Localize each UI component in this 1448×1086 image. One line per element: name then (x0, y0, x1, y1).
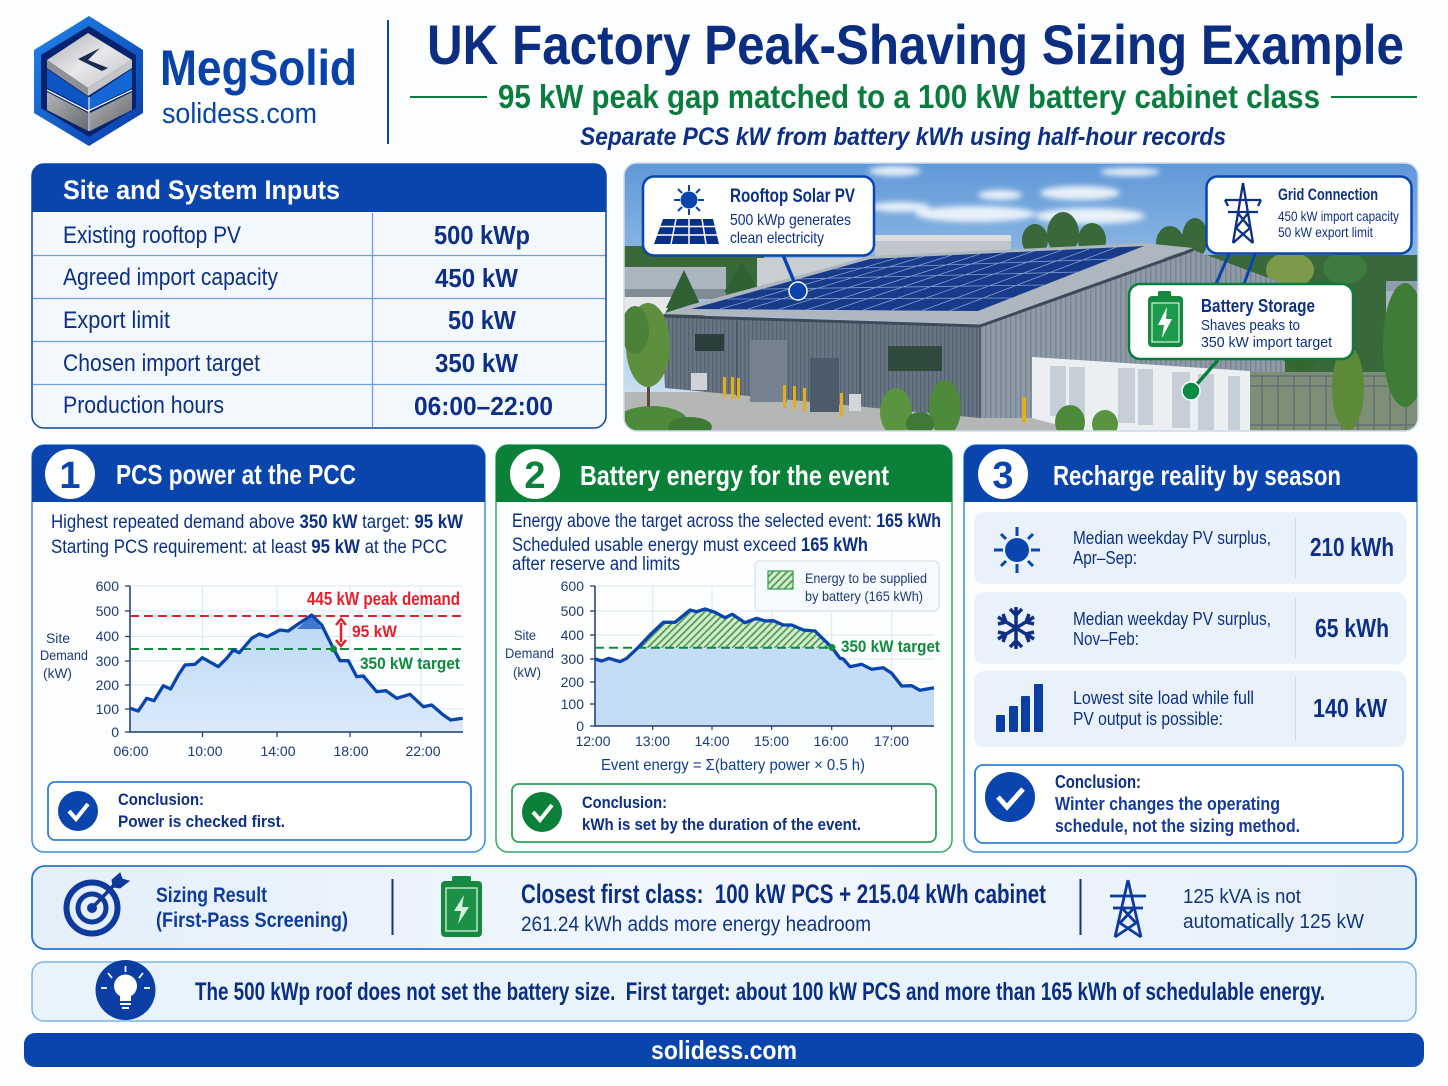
panel: factory photo illustration (616, 163, 1427, 439)
chart: event energy above target: 14:00 (694, 733, 730, 749)
conclusion 3: Conclusion: (1055, 772, 1141, 792)
icon: pylon (1225, 183, 1261, 243)
panel 3 heading: Recharge reality by season (1053, 460, 1341, 491)
chart: site demand 06:00 to 24:00: 10:00 (187, 743, 223, 759)
foreground trees and bushes (616, 283, 1427, 439)
chart: site demand 06:00 to 24:00: Demand (40, 647, 88, 663)
chart: site demand 06:00 to 24:00: 400 (96, 628, 119, 644)
panel: site and system inputs (32, 164, 606, 428)
callout: rooftop solar PV: 500 kWp generates (730, 212, 851, 229)
icon: battery (1148, 291, 1183, 347)
conclusion 2 (512, 784, 936, 842)
row: winter surplus: Median weekday PV surplus, (1073, 609, 1271, 629)
result label (156, 884, 348, 932)
row: import target: 350 kW (435, 348, 518, 378)
battery cabinets (1032, 357, 1250, 431)
row: lowest site load: 140 kW (1313, 693, 1387, 723)
icon: pylon (1110, 880, 1146, 937)
callout: battery storage: Battery Storage (1201, 296, 1315, 316)
badge: number 3 (978, 449, 1028, 499)
annotation: target: 350 kW target (360, 654, 460, 673)
chart: site demand 06:00 to 24:00: 22:00 (405, 743, 441, 759)
row: production hours (63, 391, 553, 421)
conclusion 3: schedule, not the sizing method. (1055, 816, 1300, 836)
result label: Sizing Result (156, 884, 267, 907)
chart: site demand 06:00 to 24:00: (kW) (43, 665, 72, 681)
row: import target: Chosen import target (63, 350, 260, 377)
row: export limit: 50 kW (448, 305, 516, 335)
callout: battery storage: Shaves peaks to (1201, 317, 1300, 334)
footer bar: solidess.com (651, 1035, 797, 1065)
panel 1 heading: PCS power at the PCC (116, 459, 356, 490)
callout: rooftop solar PV (643, 176, 874, 300)
panel 1 description (51, 512, 463, 558)
legend: battery energy (755, 561, 939, 611)
chart: site demand 06:00 to 24:00: 100 (96, 701, 119, 717)
badge: number 1: 1 (59, 455, 81, 497)
kVA note: 125 kVA is not (1183, 886, 1301, 908)
chart: event energy above target (505, 561, 940, 774)
brand url: solidess.com (162, 98, 317, 130)
chart: event energy above target: 100 (561, 696, 584, 712)
brand name: MegSolid (160, 40, 357, 96)
icon: bars (996, 684, 1043, 732)
result label: (First-Pass Screening) (156, 909, 348, 932)
logo: MegSolid (34, 16, 357, 146)
panel 2 description (512, 511, 941, 575)
callout: battery storage (1129, 284, 1353, 400)
conclusion 2: Conclusion: (582, 793, 667, 812)
callout: grid connection (1206, 176, 1412, 254)
row: summer surplus: Median weekday PV surplus, (1073, 528, 1271, 548)
badge: number 1 (45, 449, 95, 499)
panel 1 description: Starting PCS requirement: at least 95 kW at the PCC (51, 537, 447, 558)
chart: event energy above target: 12:00 (575, 733, 611, 749)
panel: sizing result (32, 866, 1416, 949)
footer bar (24, 1033, 1424, 1067)
chart: event energy above target: Demand (505, 645, 554, 661)
chart: site demand 06:00 to 24:00: 0 (111, 724, 119, 740)
arrow: 95 kW gap: 95 kW (352, 622, 398, 641)
arrow: 95 kW gap (336, 619, 398, 646)
legend: battery energy: by battery (165 kWh) (805, 588, 923, 604)
chart: event energy above target: 200 (561, 674, 584, 690)
panel 2: battery energy for the event (496, 445, 952, 852)
chart: event energy above target: 0 (576, 718, 584, 734)
tagline: Separate PCS kW from battery kWh using half-hour records (580, 123, 1226, 151)
row: import target (63, 348, 518, 378)
chart: site demand 06:00 to 24:00: 300 (96, 653, 119, 669)
panel 2 heading: Battery energy for the event (580, 460, 889, 491)
chart: event energy above target: 600 (561, 578, 584, 594)
panel 2 description: Energy above the target across the selected event: 165 kWh (512, 511, 941, 532)
chart: event energy above target: 17:00 (874, 733, 909, 749)
conclusion 2: kWh is set by the duration of the event. (582, 815, 861, 834)
conclusion 3: Winter changes the operating (1055, 794, 1280, 814)
row: export limit (63, 305, 516, 335)
row: winter surplus: Nov–Feb: (1073, 629, 1139, 649)
icon: snowflake (998, 607, 1034, 649)
formula: Event energy = Σ(battery power × 0.5 h) (601, 757, 865, 774)
row: lowest site load (974, 671, 1406, 747)
callout: grid connection: 50 kW export limit (1278, 224, 1373, 240)
conifers behind the building (662, 262, 760, 318)
row: winter surplus: 65 kWh (1315, 613, 1389, 643)
row: export limit: Export limit (63, 307, 170, 334)
icon: hexagon cube (34, 16, 143, 146)
distant trees (620, 212, 1418, 375)
conclusion 1 (48, 782, 471, 840)
chart: event energy above target: Site (514, 627, 536, 643)
badge: number 2 (510, 449, 560, 499)
chart: site demand 06:00 to 24:00: Site (46, 630, 70, 646)
panel 2 description: Scheduled usable energy must exceed 165 kWh (512, 535, 868, 556)
row: production hours: 06:00–22:00 (414, 391, 553, 421)
row: rooftop PV: 500 kWp (434, 220, 530, 250)
result subline: 261.24 kWh adds more energy headroom (521, 913, 871, 936)
panel 1 description: Highest repeated demand above 350 kW target: 95 kW (51, 512, 463, 533)
annotation: target: 350 kW target (841, 637, 940, 656)
conclusion 1: Power is checked first. (118, 812, 285, 831)
icon: light bulb (96, 960, 156, 1020)
row: production hours: Production hours (63, 392, 224, 419)
row: rooftop PV: Existing rooftop PV (63, 222, 241, 249)
chart: event energy above target: 15:00 (754, 733, 789, 749)
kVA note: automatically 125 kW (1183, 911, 1364, 933)
badge: number 2: 2 (524, 455, 546, 497)
icon: sun (994, 527, 1040, 573)
chart: site demand 06:00 to 24:00: 14:00 (260, 743, 296, 759)
chart: event energy above target: 500 (561, 603, 584, 619)
row: lowest site load: PV output is possible: (1073, 709, 1223, 729)
legend: battery energy: Energy to be supplied (805, 570, 927, 586)
row: rooftop PV (63, 220, 530, 250)
kVA note (1183, 886, 1364, 933)
panel 1: PCS power at the PCC (32, 445, 485, 852)
row: lowest site load: Lowest site load while full (1073, 688, 1254, 708)
row: winter surplus (974, 592, 1406, 664)
panel 2 description: after reserve and limits (512, 554, 680, 575)
callout: grid connection: Grid Connection (1278, 185, 1378, 204)
callout: rooftop solar PV: Rooftop Solar PV (730, 186, 855, 207)
row: import capacity (63, 263, 518, 293)
annotation: peak demand: 445 kW peak demand (307, 589, 460, 609)
chart: site demand 06:00 to 24:00 (40, 578, 463, 759)
row: summer surplus (974, 512, 1406, 584)
chart: site demand 06:00 to 24:00: 06:00 (113, 743, 149, 759)
chart: event energy above target: 400 (561, 627, 584, 643)
icon: battery (441, 876, 482, 937)
chart: event energy above target: (kW) (513, 664, 541, 680)
chart: site demand 06:00 to 24:00: 18:00 (333, 743, 369, 759)
row: summer surplus: 210 kWh (1310, 532, 1394, 562)
callout: battery storage: 350 kW import target (1201, 334, 1333, 351)
icon: sun over solar panel (654, 185, 719, 244)
icon: target (66, 873, 129, 934)
subtitle: 95 kW peak gap matched to a 100 kW battery cabinet class (498, 78, 1320, 115)
row: import capacity: 450 kW (435, 263, 518, 293)
chart: site demand 06:00 to 24:00: 600 (96, 578, 119, 594)
callout: grid connection leader lines (1216, 254, 1255, 284)
result headline: Closest first class: 100 kW PCS + 215.04 kWh cabinet (521, 879, 1046, 909)
panel: key takeaway (32, 960, 1416, 1021)
chart: event energy above target: 16:00 (813, 733, 849, 749)
conclusion 1: Conclusion: (118, 790, 204, 809)
callout: grid connection: 450 kW import capacity (1278, 208, 1399, 224)
row: import capacity: Agreed import capacity (63, 264, 278, 291)
badge: number 3: 3 (992, 455, 1014, 497)
panel 3: recharge reality by season (964, 445, 1417, 852)
row: summer surplus: Apr–Sep: (1073, 548, 1137, 568)
conclusion 3 (975, 765, 1403, 843)
chart: site demand 06:00 to 24:00: 500 (96, 603, 119, 619)
table heading: Site and System Inputs (63, 175, 340, 205)
building (662, 243, 1285, 423)
chart: event energy above target: 300 (561, 651, 584, 667)
callout: rooftop solar PV: clean electricity (730, 230, 824, 247)
chart: site demand 06:00 to 24:00: 200 (96, 677, 119, 693)
chart: event energy above target: 13:00 (635, 733, 670, 749)
